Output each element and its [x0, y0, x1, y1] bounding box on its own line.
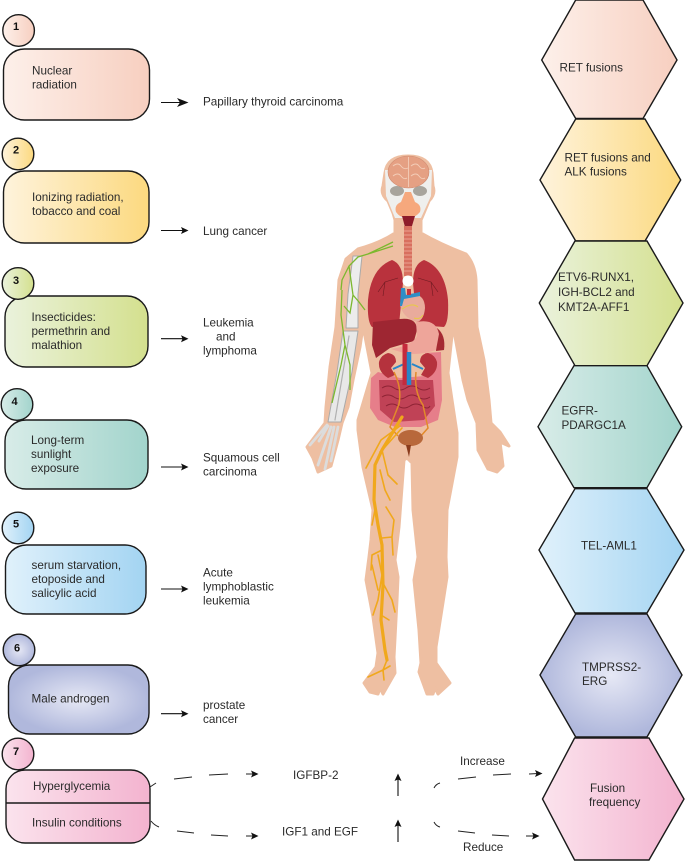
- label: nuclear radiation: radiation: [32, 79, 77, 92]
- label: male androgen: Male androgen: [32, 693, 109, 706]
- label: ionizing radiation: tobacco and coal: [32, 205, 120, 218]
- box: serum starvation: [6, 545, 146, 614]
- box: insecticides: [5, 296, 148, 367]
- label: serum starvation: serum starvation,: [32, 559, 121, 572]
- badge 5: [2, 512, 34, 544]
- stomach: [391, 321, 439, 354]
- hexagon: RET and ALK fusions: [540, 119, 681, 241]
- hexagon: TMPRSS2-ERG: ERG: [582, 675, 607, 688]
- label: reduce: Reduce: [463, 841, 503, 854]
- bladder: [398, 430, 423, 457]
- hexagon: ETV6-RUNX1: [539, 241, 683, 366]
- dashed arrow to IGF1 and EGF: [151, 821, 258, 840]
- large intestine: [370, 352, 442, 427]
- hexagon: RET and ALK fusions: RET fusions and: [564, 152, 651, 165]
- box: nuclear radiation: [4, 49, 150, 120]
- outcome: leukemia and lymphoma: Leukemia: [203, 317, 254, 330]
- panel: factor 4: [1, 389, 280, 489]
- outcome: acute lymphoblastic leukemia: leukemia: [203, 595, 250, 608]
- kidneys: [379, 353, 437, 378]
- label: insecticides: Insecticides:: [32, 311, 96, 324]
- label: serum starvation: salicylic acid: [32, 587, 96, 600]
- label: serum starvation: etoposide and: [32, 573, 105, 586]
- label: insecticides: permethrin and: [32, 325, 110, 338]
- label: IGFBP-2: IGFBP-2: [293, 769, 338, 782]
- outcome: leukemia and lymphoma: lymphoma: [203, 345, 257, 358]
- hexagon: TEL-AML1: TEL-AML1: [581, 539, 637, 552]
- panel: factor 7: [2, 738, 542, 854]
- badge 5: 5: [13, 519, 19, 531]
- eye sockets: [390, 186, 427, 196]
- label: ionizing radiation: Ionizing radiation,: [32, 191, 124, 204]
- outcome: thyroid carcinoma: Papillary thyroid carcinoma: [203, 96, 344, 109]
- hexagon: ETV6-RUNX1: KMT2A-AFF1: [558, 301, 629, 314]
- box: ionizing radiation: [4, 171, 149, 243]
- hexagon: ETV6-RUNX1: ETV6-RUNX1,: [558, 271, 634, 284]
- badge 4: [1, 389, 33, 420]
- box: sunlight: [5, 420, 148, 489]
- arrow to acute lymphoblastic leukemia: [161, 586, 188, 592]
- label: increase: Increase: [460, 755, 505, 768]
- label: insecticides: malathion: [32, 339, 82, 352]
- body silhouette: [307, 156, 509, 694]
- hexagon: EGFR-PDARGC1A: EGFR-: [562, 404, 598, 417]
- label: IGF1 and EGF: IGF1 and EGF: [282, 826, 358, 839]
- brain: [388, 156, 429, 188]
- dashed arrow to IGFBP-2: [150, 770, 258, 787]
- badge 6: 6: [14, 643, 20, 655]
- panel: factor 3: [2, 268, 257, 367]
- trachea: [404, 226, 412, 276]
- lymphatic vessels: [332, 242, 393, 403]
- panel: factor 1: [3, 15, 344, 120]
- hexagon: fusion frequency: frequency: [589, 796, 640, 809]
- arrow to lung cancer: [161, 227, 188, 234]
- panel: factor 5: [2, 512, 274, 614]
- arrow to squamous cell carcinoma: [161, 464, 188, 470]
- ureters: [390, 372, 428, 437]
- outcome: prostate cancer: prostate: [203, 699, 245, 712]
- renal vessels: [393, 344, 423, 385]
- liver: [372, 319, 417, 358]
- hexagon: fusion frequency: [542, 738, 684, 860]
- heart: [400, 288, 425, 322]
- hexagon: fusion frequency: Fusion: [590, 782, 625, 795]
- panel: factor 2: [2, 138, 267, 243]
- lungs: [368, 260, 448, 327]
- badge 4: 4: [11, 396, 18, 408]
- badge 1: [3, 15, 34, 46]
- up arrow: IGFBP-2 increases: [394, 774, 402, 796]
- panel: factor 6: [3, 634, 245, 734]
- up arrow: IGF1 and EGF increase: [394, 820, 402, 842]
- label: hyperglycemia: Hyperglycemia: [33, 780, 111, 793]
- dashed arrow: increase: [434, 770, 542, 788]
- leg nerves: [366, 417, 402, 680]
- bronchi gap: [402, 276, 414, 286]
- nasal cavity: [396, 192, 420, 217]
- hexagon: TMPRSS2-ERG: [540, 614, 682, 737]
- badge 6: [3, 634, 35, 666]
- hexagon: TMPRSS2-ERG: TMPRSS2-: [582, 661, 641, 674]
- outcome: lung cancer: Lung cancer: [203, 225, 267, 238]
- outcome: acute lymphoblastic leukemia: Acute: [203, 567, 233, 580]
- hexagon: TEL-AML1: [539, 489, 684, 613]
- outcome: leukemia and lymphoma: and: [216, 331, 236, 344]
- label: insulin conditions: Insulin conditions: [32, 817, 122, 830]
- dashed arrow: reduce: [434, 822, 540, 840]
- label: sunlight: Long-term: [31, 434, 84, 447]
- mouth and pharynx: [402, 216, 415, 227]
- spleen: [436, 328, 444, 351]
- badge 2: 2: [13, 144, 19, 156]
- box: hyperglycemia and insulin conditions: [6, 770, 150, 843]
- badge 7: 7: [13, 746, 19, 758]
- arrow to leukemia and lymphoma: [161, 335, 188, 342]
- label: nuclear radiation: Nuclear: [32, 65, 72, 78]
- skull: [385, 170, 432, 218]
- badge 3: 3: [13, 275, 19, 287]
- label: sunlight: exposure: [31, 462, 79, 475]
- badge 1: 1: [13, 21, 19, 33]
- outcome: squamous cell carcinoma: Squamous cell: [203, 452, 280, 465]
- arrow to thyroid carcinoma: [161, 98, 188, 107]
- hexagon: EGFR-PDARGC1A: PDARGC1A: [562, 419, 626, 432]
- label: sunlight: sunlight: [31, 448, 72, 461]
- human body figure: [307, 156, 509, 694]
- arrow to prostate cancer: [161, 710, 188, 717]
- badge 3: [2, 268, 34, 299]
- small intestine: [379, 380, 435, 422]
- badge 7: [2, 738, 34, 770]
- hexagon: ETV6-RUNX1: IGH-BCL2 and: [558, 286, 635, 299]
- outcome: squamous cell carcinoma: carcinoma: [203, 466, 257, 479]
- hexagon: RET fusions: [542, 0, 677, 118]
- outcome: acute lymphoblastic leukemia: lymphoblastic: [203, 581, 274, 594]
- badge 2: [2, 138, 34, 170]
- hexagon: RET and ALK fusions: ALK fusions: [564, 166, 627, 179]
- outcome: prostate cancer: cancer: [203, 713, 238, 726]
- box: male androgen: [8, 665, 149, 734]
- arm skeleton: [310, 256, 362, 469]
- hexagon: EGFR-PDARGC1A: [538, 366, 682, 488]
- hexagon: RET fusions: RET fusions: [560, 61, 623, 74]
